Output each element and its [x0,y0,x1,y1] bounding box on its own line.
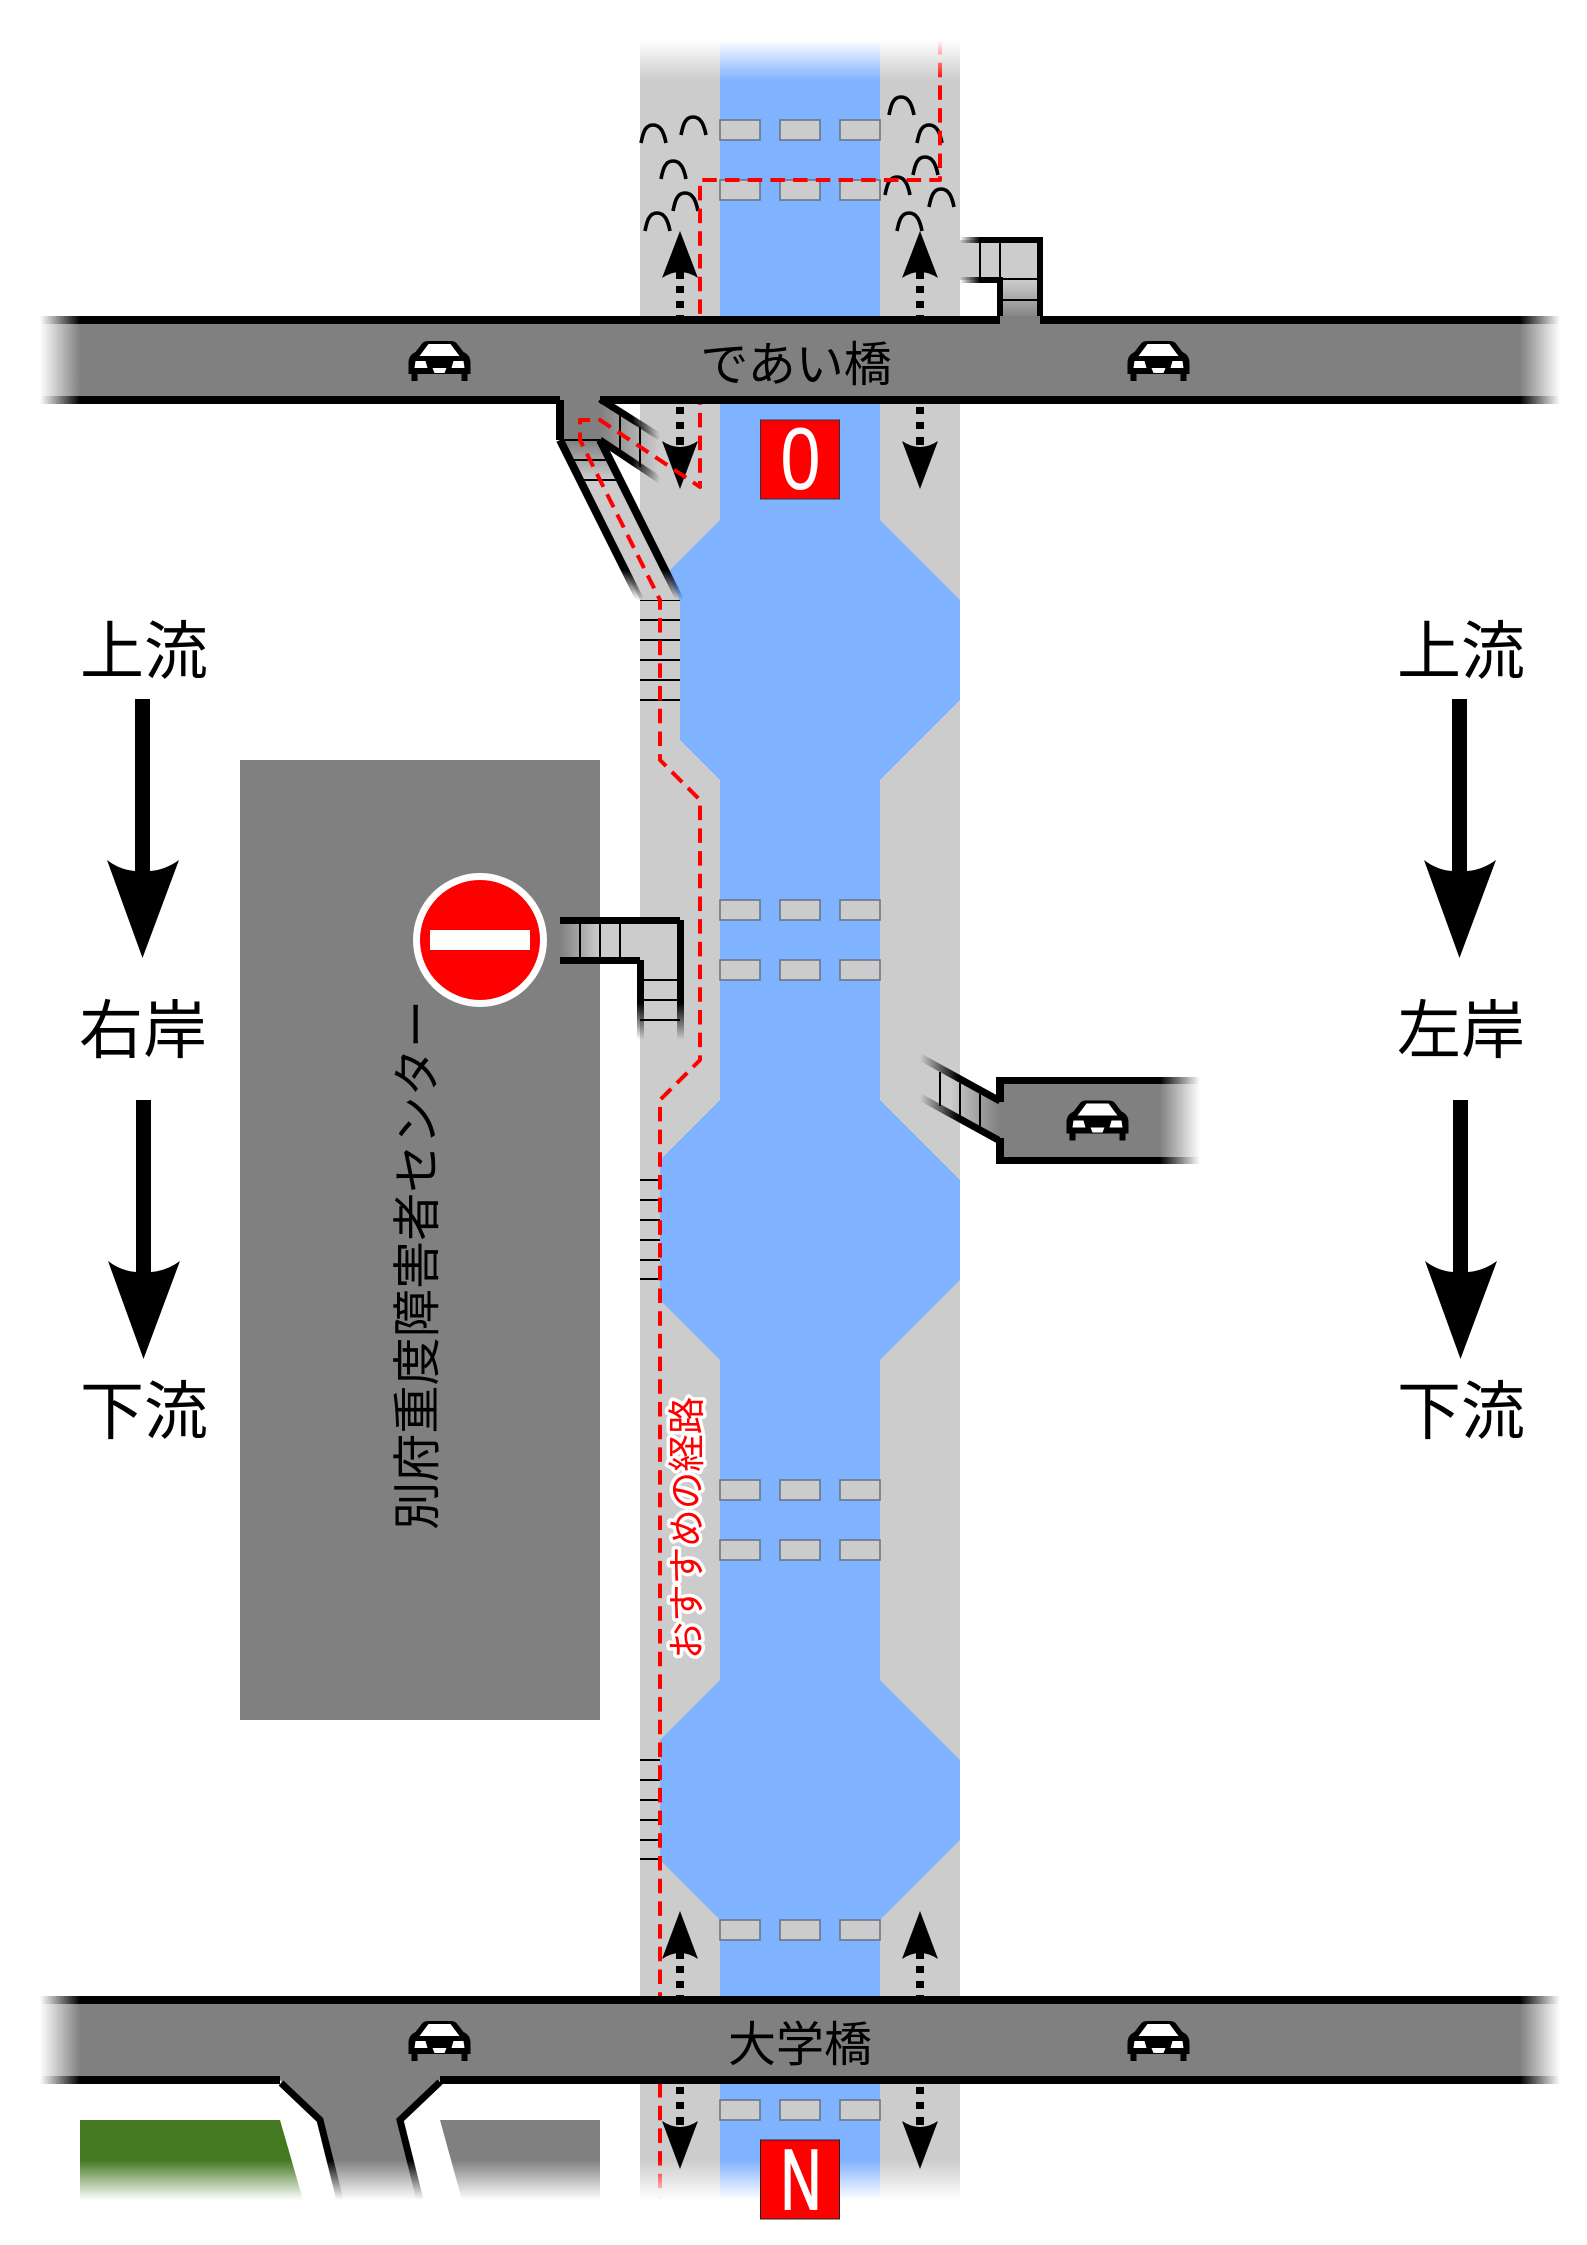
marker N [760,2133,840,2228]
icon: car 3 [408,2021,470,2061]
river bank [640,40,960,2200]
icon: car 1 [408,341,470,381]
arrows above 大学橋 [662,1911,938,1997]
marker 0 [760,410,840,509]
route label: おすすめの経路 [666,1397,708,1659]
left arrow 1 [107,699,179,958]
left arrow 2 [108,1100,180,1359]
green area [80,2120,303,2200]
right column: 上流: 上流 [1397,616,1525,688]
icon: grass tufts [641,97,954,231]
right column: 下流: 下流 [1397,1376,1525,1448]
stairs: upper right of であい橋 [960,237,1043,320]
river steps at the bulges [640,600,680,1859]
side road on the right [996,1077,1200,1164]
river water [660,40,960,2200]
arrows below 大学橋 [662,2087,938,2169]
right arrow 2 [1425,1100,1497,1359]
stepping stones [720,120,880,2120]
left column: 右岸: 右岸 [79,995,207,1067]
marker N: N [781,2133,821,2228]
icon: car 2 [1128,341,1190,381]
right arrow 1 [1424,699,1496,958]
stairs: lower left of であい橋 [556,399,680,600]
stairs: from the building [560,917,684,1040]
building name: 別府重度障害者センター [391,1000,445,1530]
bridge name: であい橋: であい橋 [700,339,892,392]
fade: bottom [60,2160,980,2202]
arrows at であい橋 [662,231,938,489]
left column: 下流: 下流 [80,1376,208,1448]
road: であい橋 [40,316,1560,404]
stairs: right side road [920,1057,1000,1141]
fade: road ends [38,314,1562,2086]
building [240,760,600,1720]
right column: 左岸: 左岸 [1397,995,1525,1067]
marker 0: 0 [780,410,821,509]
left column: 上流: 上流 [80,616,208,688]
road: 大学橋 with ramp [40,1996,1560,2200]
icon: car 4 [1128,2021,1190,2061]
icon: car 5 [1066,1100,1128,1140]
recommended route [580,40,940,2200]
icon: no entry sign [416,876,544,1004]
grey area [440,2120,600,2200]
fade: river top [640,40,960,81]
bridge name: 大学橋: 大学橋 [728,2019,872,2072]
